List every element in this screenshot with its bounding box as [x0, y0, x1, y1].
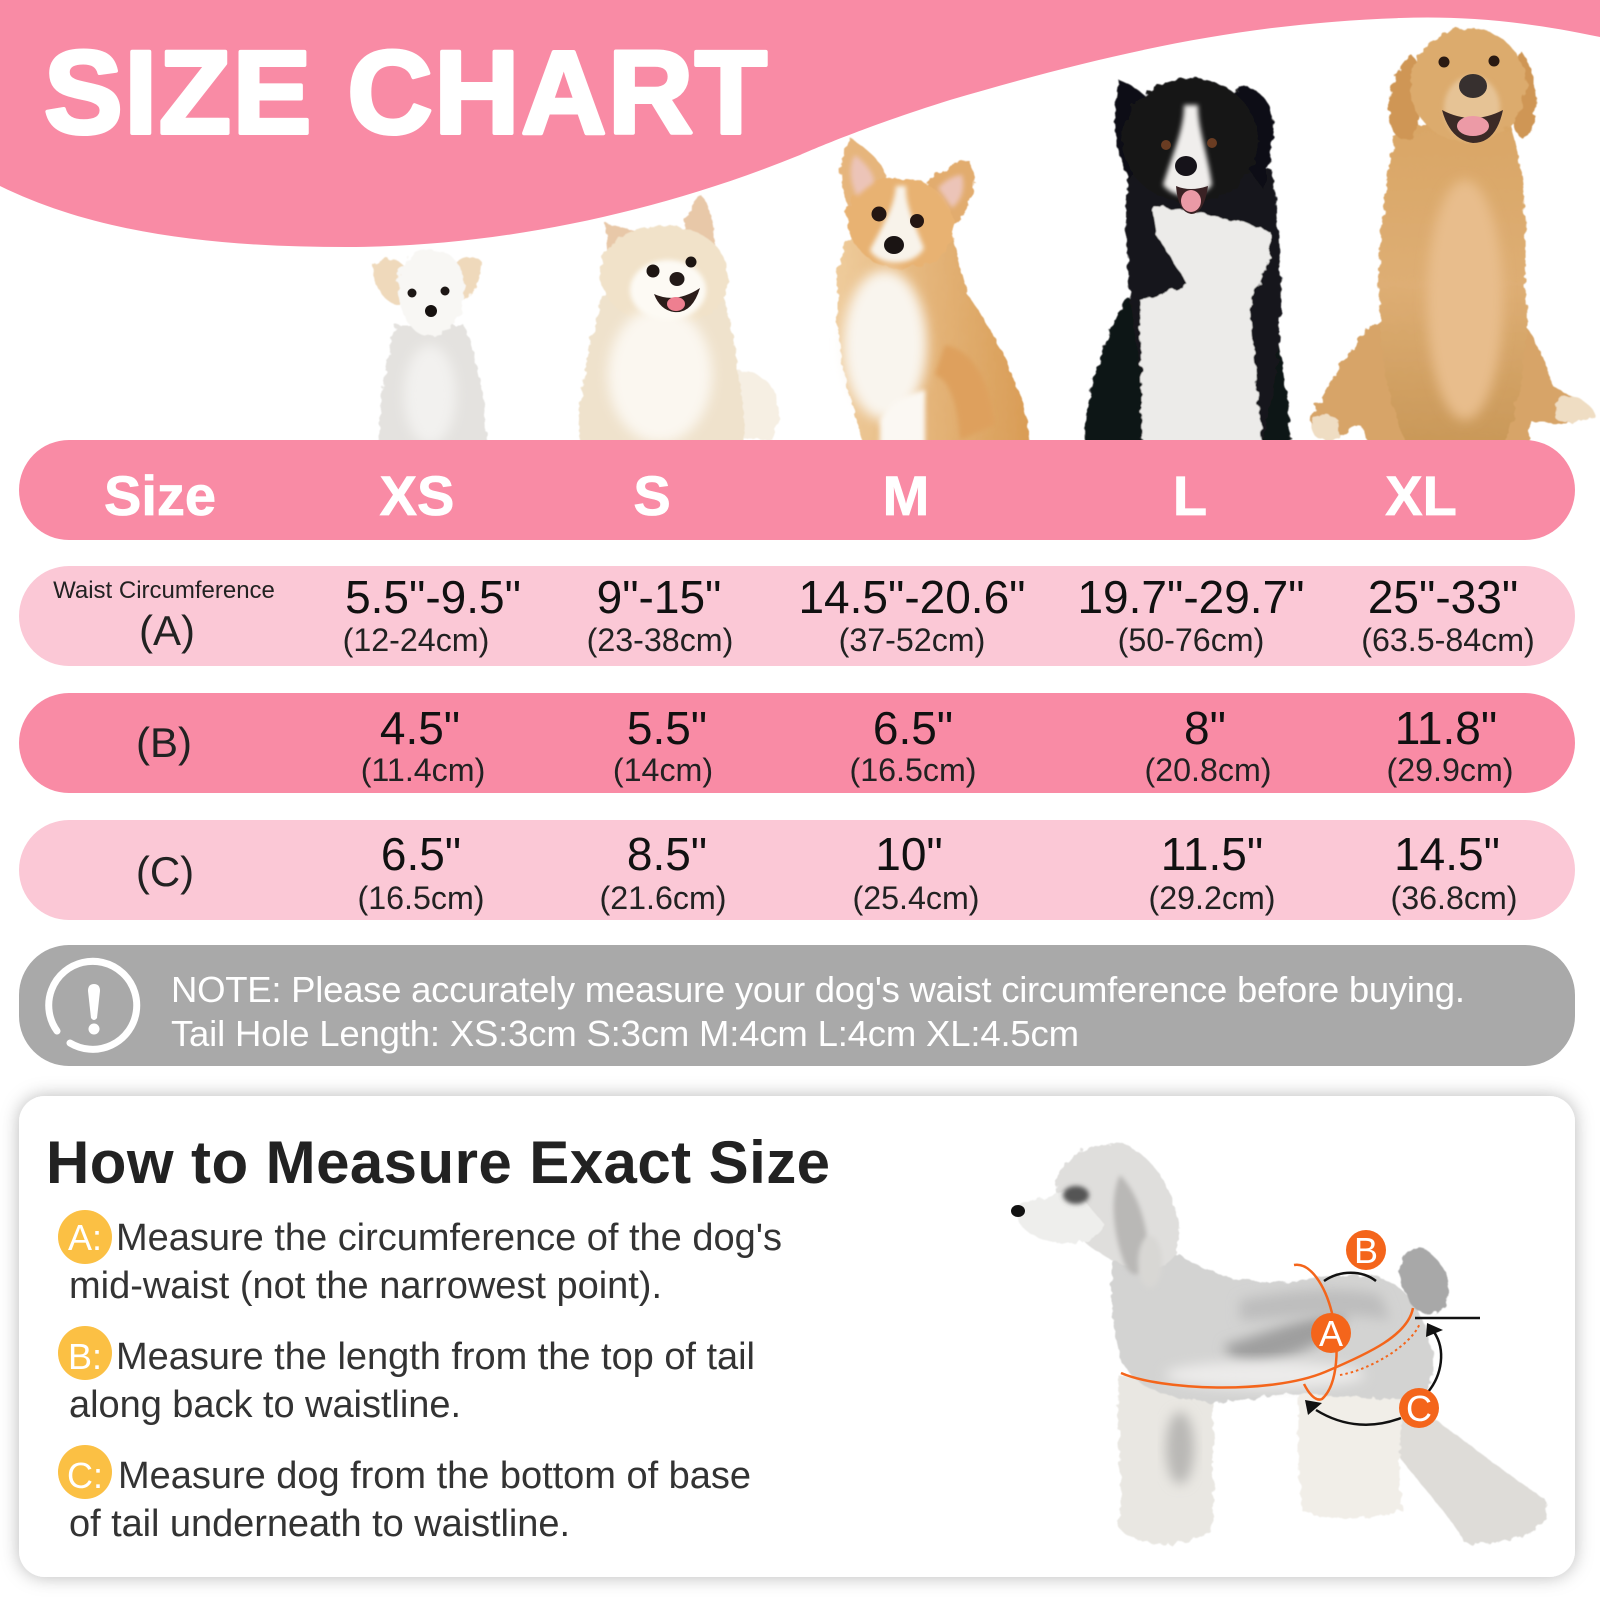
- row C: 11.5": [1161, 828, 1263, 880]
- row A: waist circumference: (50-76cm): [1118, 622, 1264, 658]
- row B: (16.5cm): [850, 752, 976, 788]
- step A: A:: [68, 1217, 102, 1258]
- dog: L: [1086, 78, 1290, 445]
- label A: [1311, 1313, 1351, 1354]
- dog photos row: [372, 28, 1596, 445]
- row B: (20.8cm): [1144, 752, 1272, 788]
- measuring dog photo: [1011, 1143, 1547, 1543]
- row B: (B): [136, 719, 192, 766]
- label C: C: [1406, 1388, 1432, 1429]
- row C: (29.2cm): [1148, 880, 1276, 916]
- row B: 11.8": [1395, 702, 1497, 754]
- row B: (29.9cm): [1386, 752, 1514, 788]
- step B: B:: [68, 1336, 102, 1377]
- row A: waist circumference: 9"-15": [597, 571, 721, 623]
- label C: [1399, 1388, 1439, 1429]
- row B: [19, 693, 1575, 793]
- header row: M: [883, 464, 929, 527]
- row A: waist circumference: [19, 566, 1575, 666]
- row A: waist circumference: 25"-33": [1368, 571, 1518, 623]
- note panel: [19, 945, 1575, 1066]
- note text: Tail Hole Length: XS:3cm S:3cm M:4cm L:4cm XL:4.5cm: [171, 1013, 1079, 1054]
- row C: (16.5cm): [358, 880, 484, 916]
- size table: [19, 440, 1575, 920]
- step B: along back to waistline.: [69, 1384, 461, 1426]
- row B: (11.4cm): [361, 752, 485, 788]
- panel: how to measure: [19, 1096, 1575, 1577]
- row C: 6.5": [381, 828, 461, 880]
- step A: Measure the circumference of the dog's: [116, 1217, 782, 1259]
- step A: mid-waist (not the narrowest point).: [69, 1265, 662, 1307]
- step C: C:: [67, 1455, 103, 1496]
- step C: of tail underneath to waistline.: [69, 1503, 570, 1545]
- step C: Measure dog from the bottom of base: [118, 1455, 751, 1497]
- row A: waist circumference: 5.5"-9.5": [345, 571, 521, 623]
- title: SIZE CHART: [44, 27, 767, 159]
- row C: [19, 820, 1575, 920]
- step B: [58, 1326, 755, 1426]
- label A: A: [1319, 1313, 1343, 1354]
- how-to heading: How to Measure Exact Size: [46, 1129, 830, 1196]
- dog: S: [578, 196, 779, 445]
- row A: waist circumference: (23-38cm): [587, 622, 733, 658]
- header row: XS: [380, 464, 454, 527]
- icon: warning exclamation: [49, 961, 137, 1049]
- header row: [19, 440, 1575, 540]
- row C: (36.8cm): [1390, 880, 1518, 916]
- row A: waist circumference: (12-24cm): [343, 622, 489, 658]
- header row: XL: [1385, 464, 1457, 527]
- row A: waist circumference: (63.5-84cm): [1361, 622, 1535, 658]
- dog: XL: [1310, 28, 1596, 445]
- row A: waist circumference: Waist Circumference: [53, 577, 275, 604]
- black arrows: [1305, 1273, 1480, 1425]
- header row: Size: [104, 464, 216, 527]
- row C: 14.5": [1394, 828, 1500, 880]
- row B: 8": [1184, 702, 1226, 754]
- row B: 6.5": [873, 702, 953, 754]
- row A: waist circumference: (37-52cm): [839, 622, 985, 658]
- dog: M: [838, 139, 1030, 445]
- header row: L: [1173, 464, 1207, 527]
- row C: 8.5": [627, 828, 707, 880]
- row C: (21.6cm): [600, 880, 726, 916]
- step C: [58, 1445, 751, 1545]
- orange measuring lines: [1121, 1265, 1420, 1400]
- row A: waist circumference: (A): [139, 607, 195, 654]
- row B: (14cm): [613, 752, 713, 788]
- row A: waist circumference: 14.5"-20.6": [798, 571, 1026, 623]
- row B: 5.5": [627, 702, 707, 754]
- row C: (25.4cm): [852, 880, 980, 916]
- label B: [1346, 1230, 1386, 1271]
- row C: 10": [875, 828, 943, 880]
- header row: S: [633, 464, 671, 527]
- step A: [58, 1210, 782, 1307]
- step B: Measure the length from the top of tail: [116, 1336, 755, 1378]
- row A: waist circumference: 19.7"-29.7": [1077, 571, 1305, 623]
- row C: (C): [136, 848, 194, 895]
- header wave: [0, 0, 1600, 247]
- note text: NOTE: Please accurately measure your dog's waist circumference before buying.: [171, 969, 1465, 1010]
- note text: [171, 969, 1465, 1054]
- row B: 4.5": [380, 702, 460, 754]
- dog: XS: [372, 250, 486, 445]
- label B: B: [1354, 1230, 1378, 1271]
